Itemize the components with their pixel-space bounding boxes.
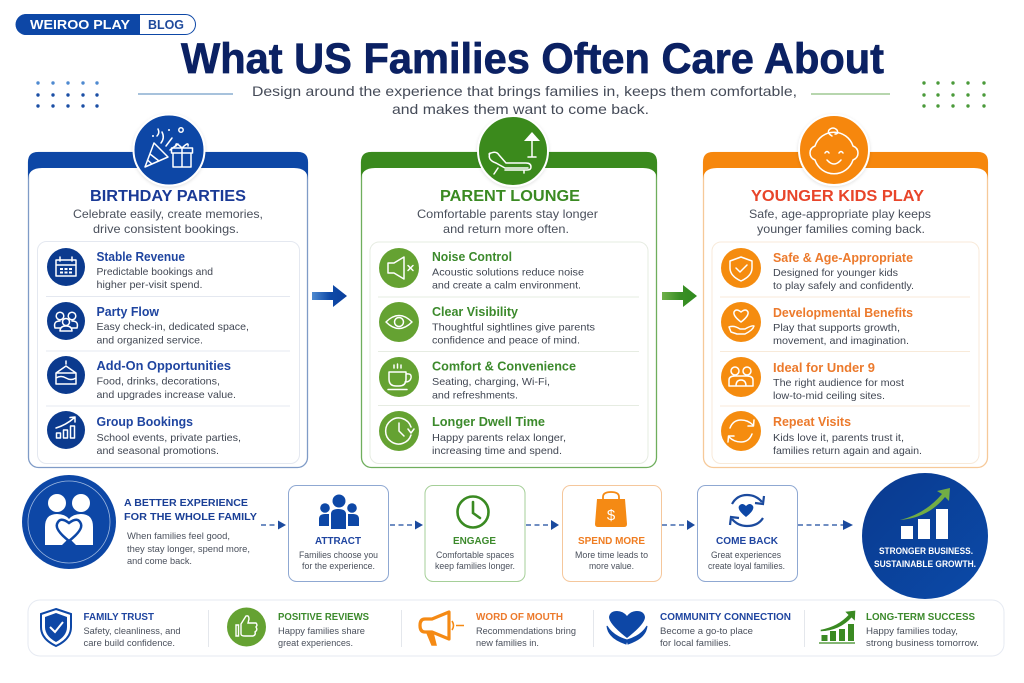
word of mouth: new families in. xyxy=(476,638,539,649)
step: engage xyxy=(425,486,525,582)
arrow: to growth xyxy=(798,520,853,530)
panel intro xyxy=(749,207,931,236)
community connection xyxy=(607,611,791,649)
heading: YOUNGER KIDS PLAY xyxy=(751,188,924,205)
stable revenue: Predictable bookings and xyxy=(96,266,213,278)
arrow: to come back xyxy=(662,520,695,530)
subtitle: and makes them want to come back. xyxy=(392,101,649,117)
longer dwell time: Longer Dwell Time xyxy=(432,415,545,429)
dots right xyxy=(922,81,986,108)
step: engage: Comfortable spaces xyxy=(436,550,514,560)
icon: shopping bag: $ xyxy=(607,507,616,524)
panel: birthday parties xyxy=(28,114,308,468)
community connection: Become a go-to place xyxy=(660,626,753,637)
party flow: Party Flow xyxy=(96,305,159,319)
clear visibility: confidence and peace of mind. xyxy=(432,334,580,346)
subtitle xyxy=(252,83,797,117)
repeat visits: Kids love it, parents trust it, xyxy=(773,432,904,444)
growth circle: SUSTAINABLE GROWTH. xyxy=(874,559,976,570)
comfort and convenience: Seating, charging, Wi-Fi, xyxy=(432,376,550,388)
positive reviews: great experiences. xyxy=(278,638,353,649)
party flow xyxy=(47,302,249,346)
step: engage: keep families longer. xyxy=(435,561,515,571)
safe and age-appropriate: Designed for younger kids xyxy=(773,267,898,279)
positive reviews xyxy=(227,608,369,649)
arrow: to spend more xyxy=(526,520,559,530)
better experience text: they stay longer, spend more, xyxy=(127,544,250,555)
clear visibility: Clear Visibility xyxy=(432,305,518,319)
ideal for under 9 xyxy=(721,357,904,402)
step: come back: COME BACK xyxy=(716,535,778,547)
step: come back xyxy=(698,486,798,582)
safe and age-appropriate: Safe & Age-Appropriate xyxy=(773,251,913,265)
noise control: and create a calm environment. xyxy=(432,280,581,292)
arrow: lounge to kids xyxy=(662,285,697,307)
bar chart icon xyxy=(900,488,950,539)
comfort and convenience xyxy=(379,357,576,402)
growth circle xyxy=(862,473,988,599)
benefit list card xyxy=(370,242,648,464)
panel intro xyxy=(417,207,598,236)
add-on opportunities: Food, drinks, decorations, xyxy=(96,376,220,388)
arrow: birthday to lounge xyxy=(312,285,347,307)
group bookings: and seasonal promotions. xyxy=(96,445,219,457)
ideal for under 9: low-to-mid ceiling sites. xyxy=(773,390,885,402)
step: come back: Great experiences xyxy=(711,550,781,560)
add-on opportunities: and upgrades increase value. xyxy=(96,389,236,401)
panel intro: drive consistent bookings. xyxy=(93,222,239,236)
icon: heart with cycle arrows xyxy=(730,495,764,526)
icon: family with heart xyxy=(22,475,116,569)
positive reviews: POSITIVE REVIEWS xyxy=(278,611,369,623)
brand badge xyxy=(16,14,196,35)
noise control: Acoustic solutions reduce noise xyxy=(432,266,584,278)
panel intro: Comfortable parents stay longer xyxy=(417,207,598,221)
arrow: to attract xyxy=(261,520,286,530)
title: What US Families Often Care About xyxy=(181,35,884,83)
noise control: Noise Control xyxy=(432,250,512,264)
party flow: and organized service. xyxy=(96,334,203,346)
ideal for under 9: The right audience for most xyxy=(773,377,904,389)
panel intro: and return more often. xyxy=(443,222,569,236)
panel intro xyxy=(73,207,263,236)
repeat visits xyxy=(721,411,922,457)
community connection: COMMUNITY CONNECTION xyxy=(660,611,791,623)
step: engage: ENGAGE xyxy=(453,535,496,547)
developmental benefits xyxy=(721,302,913,347)
comfort and convenience: and refreshments. xyxy=(432,390,518,402)
comfort and convenience: Comfort & Convenience xyxy=(432,360,576,374)
word of mouth: WORD OF MOUTH xyxy=(476,611,563,623)
family trust: care build confidence. xyxy=(84,638,175,649)
word of mouth xyxy=(420,611,576,649)
benefit list card xyxy=(712,242,979,464)
repeat visits: families return again and again. xyxy=(773,445,922,457)
developmental benefits: Play that supports growth, xyxy=(773,322,900,334)
developmental benefits: Developmental Benefits xyxy=(773,306,913,320)
better experience text: and come back. xyxy=(127,556,192,567)
step: attract: for the experience. xyxy=(302,561,375,571)
long-term success: Happy families today, xyxy=(866,626,958,637)
group bookings xyxy=(47,411,241,457)
footer band xyxy=(28,600,1004,656)
subtitle: Design around the experience that brings families in, keeps them comfortable, xyxy=(252,83,797,99)
safe and age-appropriate xyxy=(721,248,914,292)
panel intro: Safe, age-appropriate play keeps xyxy=(749,207,931,221)
better experience text: When families feel good, xyxy=(127,531,230,542)
heading: PARENT LOUNGE xyxy=(440,188,580,205)
heading: BIRTHDAY PARTIES xyxy=(90,188,246,205)
long-term success: strong business tomorrow. xyxy=(866,638,979,649)
longer dwell time: increasing time and spend. xyxy=(432,445,562,457)
step: come back: create loyal families. xyxy=(708,561,785,571)
icon: clock xyxy=(458,496,488,528)
step: attract: ATTRACT xyxy=(315,535,362,547)
stable revenue: Stable Revenue xyxy=(96,250,185,264)
step: spend more: SPEND MORE xyxy=(578,535,645,547)
benefit list card xyxy=(38,242,300,464)
long-term success: LONG-TERM SUCCESS xyxy=(866,611,975,623)
party flow: Easy check-in, dedicated space, xyxy=(96,321,249,333)
family trust xyxy=(41,609,180,649)
add-on opportunities: Add-On Opportunities xyxy=(96,359,231,373)
stable revenue xyxy=(47,248,213,291)
step: attract: Families choose you xyxy=(299,550,378,560)
icon: lounge chair and lamp xyxy=(478,116,548,186)
panel: younger kids play xyxy=(703,115,988,468)
longer dwell time: Happy parents relax longer, xyxy=(432,432,566,444)
icon: party popper and gift xyxy=(134,114,204,186)
brand badge: WEIROO PLAY xyxy=(30,17,130,32)
family trust: Safety, cleanliness, and xyxy=(84,626,180,637)
arrow: to engage xyxy=(390,520,423,530)
longer dwell time xyxy=(379,411,566,457)
ideal for under 9: Ideal for Under 9 xyxy=(773,361,875,375)
better experience text xyxy=(124,497,257,567)
positive reviews: Happy families share xyxy=(278,626,365,637)
better experience text: FOR THE WHOLE FAMILY xyxy=(124,511,257,523)
step: spend more: More time leads to xyxy=(575,550,648,560)
icon: baby face xyxy=(799,115,869,185)
step: spend more xyxy=(562,486,662,582)
step: attract xyxy=(288,486,388,582)
panel intro: younger families coming back. xyxy=(757,222,925,236)
community connection: for local families. xyxy=(660,638,731,649)
add-on opportunities xyxy=(47,356,236,401)
group bookings: School events, private parties, xyxy=(96,432,241,444)
repeat visits: Repeat Visits xyxy=(773,415,851,429)
safe and age-appropriate: to play safely and confidently. xyxy=(773,280,914,292)
noise control xyxy=(379,248,584,292)
word of mouth: Recommendations bring xyxy=(476,626,576,637)
stable revenue: higher per-visit spend. xyxy=(96,279,202,291)
icon: group of people xyxy=(319,494,359,529)
dots left xyxy=(36,81,99,108)
group bookings: Group Bookings xyxy=(96,415,193,429)
panel intro: Celebrate easily, create memories, xyxy=(73,207,263,221)
developmental benefits: movement, and imagination. xyxy=(773,335,909,347)
growth circle: STRONGER BUSINESS. xyxy=(879,546,973,557)
step: spend more: more value. xyxy=(589,561,634,571)
long-term success xyxy=(819,611,979,649)
clear visibility xyxy=(379,302,595,346)
clear visibility: Thoughtful sightlines give parents xyxy=(432,322,595,334)
brand badge: BLOG xyxy=(148,17,184,32)
better experience text: A BETTER EXPERIENCE xyxy=(124,497,248,509)
panel: parent lounge xyxy=(361,116,657,468)
family trust: FAMILY TRUST xyxy=(84,611,155,623)
